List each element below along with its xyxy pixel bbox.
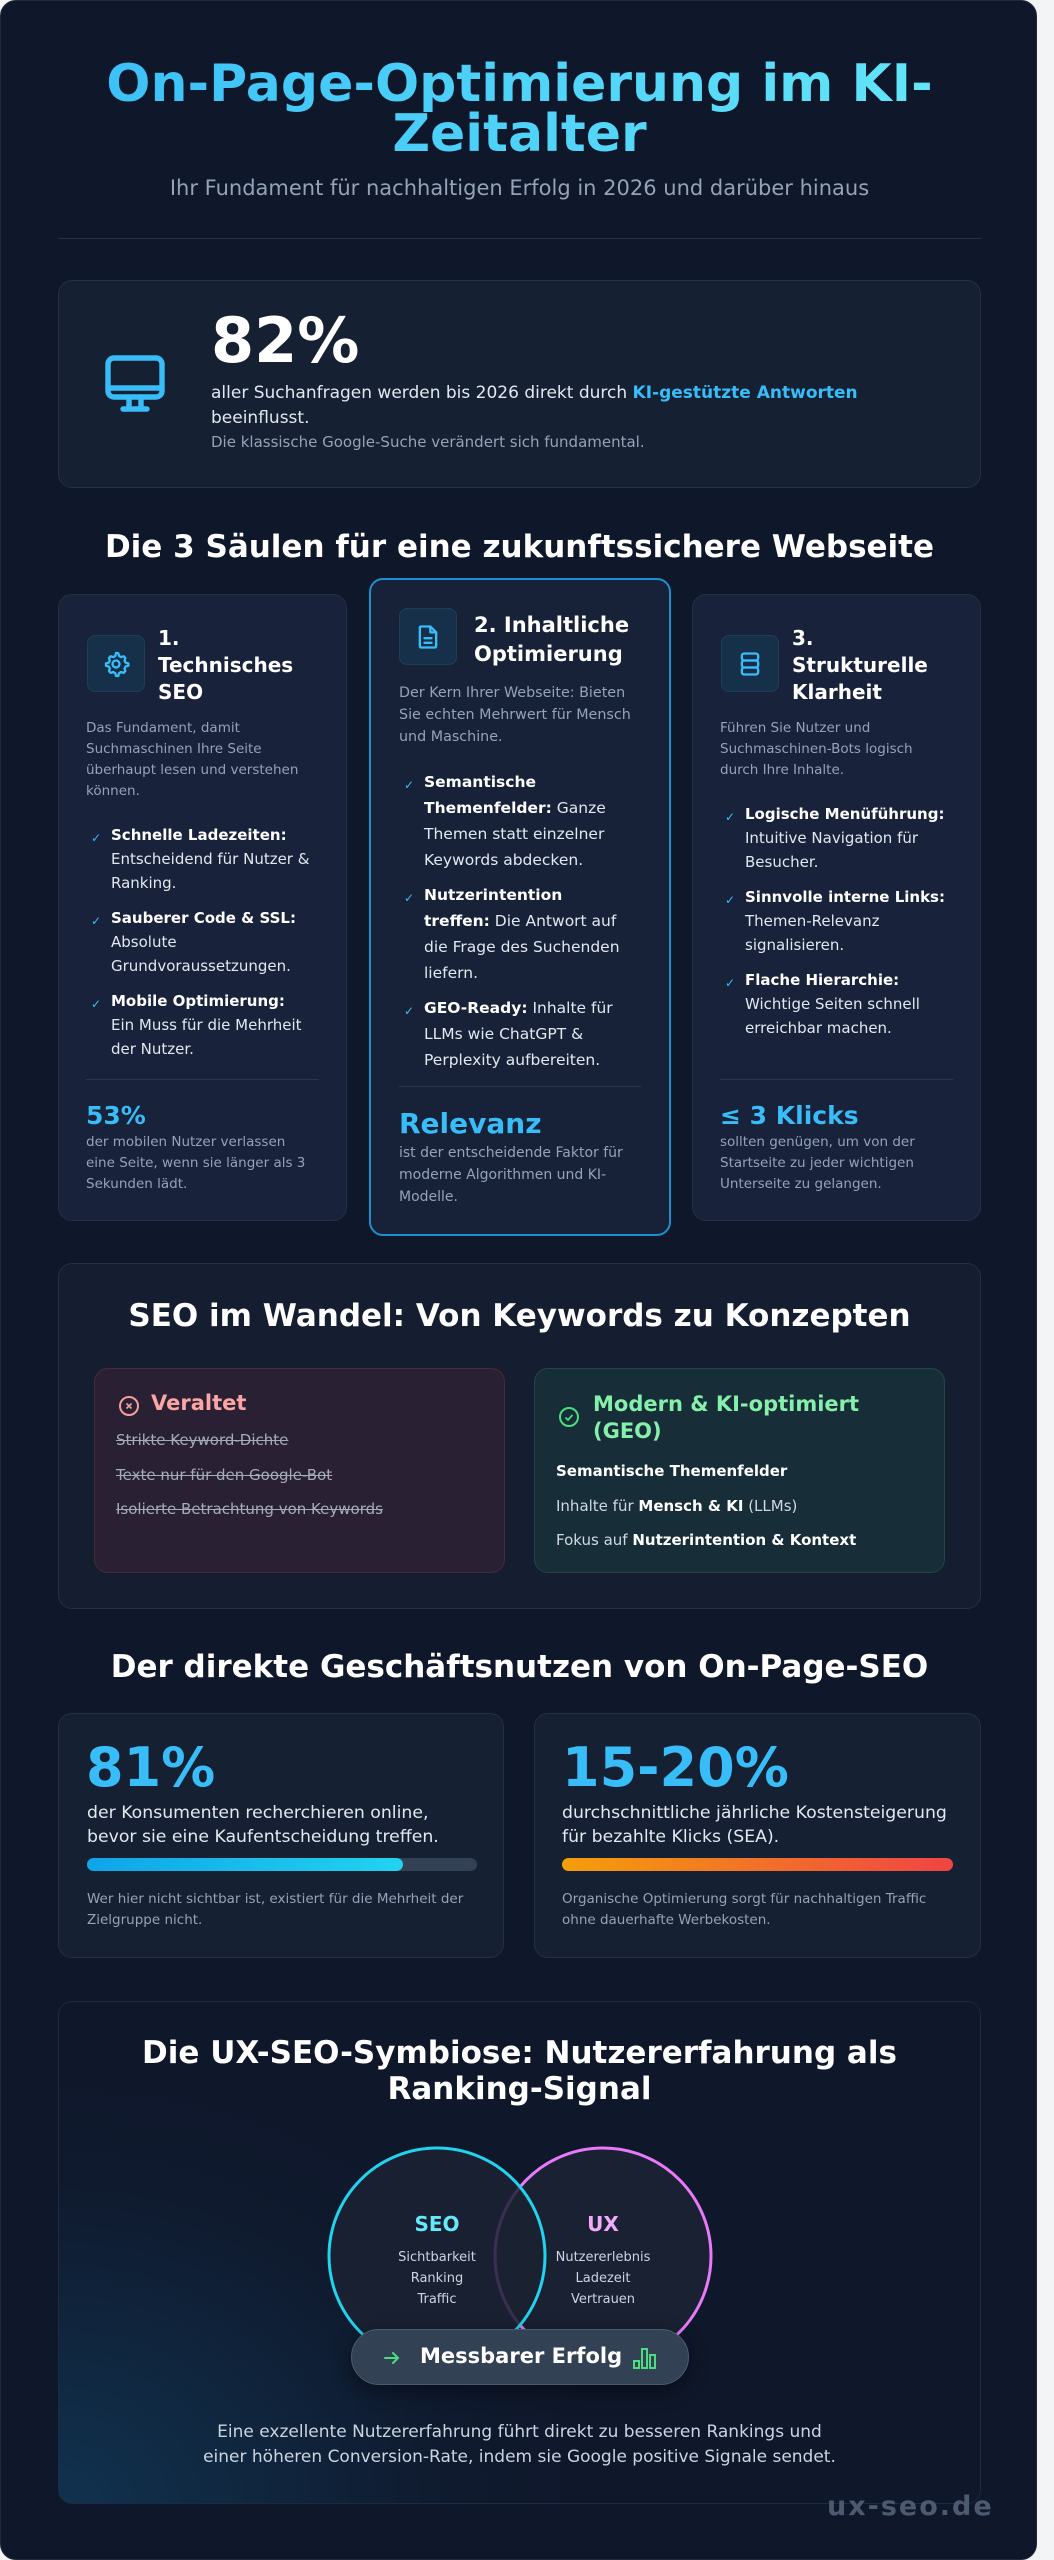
stat card: 81%	[58, 1713, 504, 1958]
progress bar full	[562, 1858, 953, 1871]
icon: check circle	[559, 1407, 579, 1427]
heading	[593, 1392, 859, 1443]
list: veraltet items: Isolierte Betrachtung von Keywords	[116, 1500, 383, 1518]
icon: x circle	[119, 1396, 139, 1416]
items: Inhalte für Mensch & KI (LLMs)	[556, 1497, 797, 1515]
list: veraltet items: Texte nur für den Google-Bot	[116, 1466, 332, 1484]
panel: pillar 2 (highlighted)	[369, 578, 671, 1236]
icon: bars	[633, 2348, 656, 2369]
heading: (GEO)	[593, 1419, 662, 1443]
stat: 53%: der mobilen Nutzer verlassen eine Seite, wenn sie länger als 3 Sekunden lädt.	[86, 1134, 305, 1192]
bullet list: Flache Hierarchie:	[745, 971, 899, 989]
bullet list	[726, 805, 945, 1037]
heading: Veraltet	[151, 1391, 246, 1415]
venn diagram: Ladezeit	[576, 2271, 630, 2286]
heading: SEO	[158, 680, 203, 704]
panel: SEO im Wandel	[58, 1263, 981, 1609]
heading: SEO im Wandel: Von Keywords zu Konzepten	[128, 1298, 911, 1334]
heading: Ranking-Signal	[388, 2071, 651, 2107]
heading: 3.	[792, 626, 814, 650]
stat card: 81%: bevor sie eine Kaufentscheidung treffen.	[87, 1827, 439, 1847]
description: Das Fundament, damit Suchmaschinen Ihre Seite überhaupt lesen und verstehen können.	[86, 720, 298, 799]
heading: Strukturelle	[792, 653, 928, 677]
icon: arrow	[384, 2352, 400, 2364]
caption: einer höheren Conversion-Rate, indem sie Google positive Signale sendet.	[203, 2447, 836, 2467]
list: veraltet items	[116, 1431, 383, 1518]
stat text: beeinflusst.	[211, 408, 309, 428]
venn diagram: Nutzererlebnis	[556, 2250, 651, 2265]
caption: Eine exzellente Nutzererfahrung führt direkt zu besseren Rankings und	[217, 2422, 822, 2442]
stat card: 15-20%: Organische Optimierung sorgt für nachhaltigen Traffic ohne dauerhafte Werbekosten.	[562, 1891, 926, 1928]
venn diagram: SEO	[414, 2212, 460, 2236]
stat card: 81%: Wer hier nicht sichtbar ist, existiert für die Mehrheit der Zielgruppe nicht.	[87, 1891, 463, 1928]
bullet list	[406, 773, 620, 1069]
progress bar 81%	[87, 1858, 477, 1871]
stat: 3 Klicks: ≤ 3 Klicks	[720, 1101, 859, 1130]
stat: 53%: 53%	[86, 1101, 146, 1130]
heading: Modern & KI-optimiert	[593, 1392, 859, 1416]
stat card: 15-20%	[534, 1713, 981, 1958]
bullet list: Sinnvolle interne Links: Themen-Relevanz signalisieren.	[745, 888, 945, 954]
venn diagram	[328, 2146, 712, 2336]
stat card: 82%	[58, 280, 981, 488]
box: veraltet	[94, 1368, 505, 1573]
pill: Messbarer Erfolg: Messbarer Erfolg	[420, 2344, 622, 2368]
venn diagram: Ranking	[411, 2271, 463, 2286]
stat: 53%	[86, 1101, 305, 1192]
stat card: 15-20%: für bezahlte Klicks (SEA).	[562, 1827, 779, 1847]
heading	[158, 626, 293, 704]
description: Der Kern Ihrer Webseite: Bieten Sie echten Mehrwert für Mensch und Maschine.	[399, 685, 631, 745]
items	[556, 1462, 856, 1549]
title	[21, 59, 1018, 159]
bullet list: Nutzerintention	[424, 886, 562, 904]
heading: Geschäftsnutzen: Der direkte Geschäftsnutzen von On-Page-SEO	[111, 1649, 928, 1685]
stat card: 15-20%: durchschnittliche jährliche Kostensteigerung	[562, 1803, 947, 1823]
bullet list: treffen: Die Antwort auf die Frage des Suchenden liefern.	[424, 912, 620, 982]
panel: pillar 1	[58, 594, 347, 1221]
list: veraltet items: Strikte Keyword-Dichte	[116, 1431, 288, 1449]
panel: pillar 3	[692, 594, 981, 1221]
heading	[474, 613, 629, 666]
bullet list: Mobile Optimierung:	[111, 992, 285, 1010]
stat card: 81%: der Konsumenten recherchieren online,	[87, 1803, 428, 1823]
subtitle: Ihr Fundament für nachhaltigen Erfolg in 2026 und darüber hinaus	[170, 176, 869, 200]
bullet list: Sauberer Code & SSL: Absolute Grundvoraussetzungen.	[111, 909, 296, 975]
bullet list: Ein Muss für die Mehrheit der Nutzer.	[111, 1016, 302, 1058]
stat: 3 Klicks	[720, 1101, 915, 1192]
bullet list: Schnelle Ladezeiten: Entscheidend für Nutzer & Ranking.	[111, 826, 309, 892]
heading: 3 Säulen: Die 3 Säulen für eine zukunftssichere Webseite	[105, 529, 934, 565]
items: Fokus auf Nutzerintention & Kontext	[556, 1531, 856, 1549]
icon: document	[399, 608, 457, 665]
stat card: 81%: 81%	[86, 1736, 215, 1799]
items: Semantische Themenfelder	[556, 1462, 787, 1480]
panel: UX-SEO-Symbiose	[58, 2001, 981, 2504]
title: Zeitalter	[392, 104, 647, 164]
stat: Relevanz: Relevanz	[399, 1107, 542, 1140]
heading	[142, 2035, 897, 2107]
heading: Die UX-SEO-Symbiose: Nutzererfahrung als	[142, 2035, 897, 2071]
box: modern	[534, 1368, 945, 1573]
heading: Technisches	[158, 653, 293, 677]
icon: database	[721, 635, 779, 692]
stat: Relevanz	[399, 1107, 623, 1205]
heading: Optimierung	[474, 642, 623, 666]
bullet list: Semantische Themenfelder: Ganze Themen statt einzelner Keywords abdecken.	[424, 773, 606, 869]
description: Führen Sie Nutzer und Suchmaschinen-Bots logisch durch Ihre Inhalte.	[720, 720, 913, 778]
icon: monitor	[105, 355, 165, 412]
title: On-Page-Optimierung im KI-	[106, 54, 933, 114]
stat text	[211, 304, 858, 451]
bullet list	[92, 826, 309, 1058]
stat: 3 Klicks: sollten genügen, um von der Startseite zu jeder wichtigen Unterseite zu gelangen.	[720, 1134, 915, 1192]
icon: gear	[87, 635, 145, 692]
heading: 1.	[158, 626, 180, 650]
bullet list: Wichtige Seiten schnell erreichbar machen.	[745, 995, 920, 1037]
venn diagram: UX	[587, 2212, 619, 2236]
heading: 2. Inhaltliche	[474, 613, 629, 637]
stat: Relevanz: ist der entscheidende Faktor für moderne Algorithmen und KI-Modelle.	[399, 1145, 623, 1205]
watermark: ux-seo.de	[827, 2491, 994, 2522]
bullet list: Logische Menüführung: Intuitive Navigation für Besucher.	[745, 805, 944, 871]
stat text: aller Suchanfragen werden bis 2026 direkt durch KI-gestützte Antworten	[211, 383, 858, 403]
venn diagram: Sichtbarkeit	[398, 2250, 476, 2265]
pill: Messbarer Erfolg	[351, 2329, 689, 2385]
stat text: 82%	[211, 304, 359, 377]
stat text: Die klassische Google-Suche verändert sich fundamental.	[211, 433, 645, 451]
heading	[792, 626, 928, 704]
venn diagram: Vertrauen	[571, 2292, 635, 2307]
stat card: 15-20%: 15-20%	[562, 1736, 789, 1799]
bullet list: GEO-Ready: Inhalte für LLMs wie ChatGPT & Perplexity aufbereiten.	[424, 999, 613, 1069]
heading: Klarheit	[792, 680, 882, 704]
venn diagram: Traffic	[416, 2292, 457, 2307]
caption	[203, 2422, 836, 2467]
